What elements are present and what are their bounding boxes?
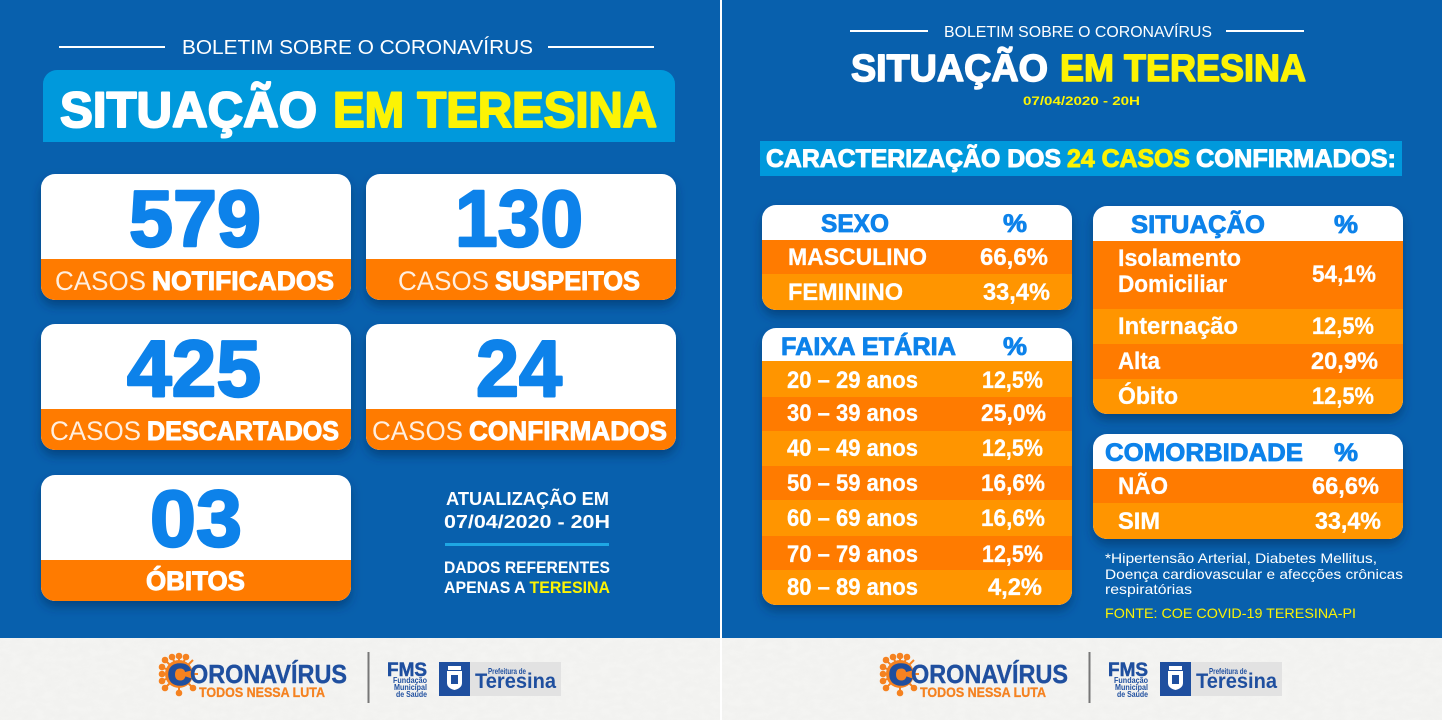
table: situação: Óbito bbox=[1118, 382, 1178, 410]
wordmark: ORONAVÍRUS bbox=[911, 659, 1068, 689]
table: situação: Alta bbox=[1118, 348, 1161, 375]
footnote: Doença cardiovascular e afecções crônicas bbox=[1105, 566, 1403, 582]
wordmark: ORONAVÍRUS bbox=[190, 659, 347, 689]
table: situação: 12,5% bbox=[1312, 383, 1374, 410]
footnote: *Hipertensão Arterial, Diabetes Mellitus, bbox=[1105, 550, 1377, 566]
table: situação: Domiciliar bbox=[1118, 271, 1227, 298]
table: comorbidade: 33,4% bbox=[1315, 508, 1381, 535]
table: faixa etária: % bbox=[1003, 333, 1027, 361]
card: casos suspeitos bbox=[366, 174, 676, 300]
table: faixa etária: 20 – 29 anos bbox=[787, 367, 918, 394]
table: situação: Internação bbox=[1118, 313, 1238, 340]
label: ÓBITOS bbox=[146, 565, 245, 596]
Prefeitura de Teresina logo bbox=[439, 662, 561, 696]
table: sexo: SEXO bbox=[821, 210, 889, 238]
FMS logo: de Saúde bbox=[396, 690, 427, 699]
label bbox=[372, 416, 667, 446]
number: 130 bbox=[455, 174, 583, 263]
label: CASOS bbox=[398, 266, 489, 296]
number: 24 bbox=[476, 324, 562, 413]
card: casos notificados bbox=[41, 174, 351, 300]
right header: EM TERESINA bbox=[1060, 48, 1306, 90]
label: DESCARTADOS bbox=[147, 416, 339, 446]
label bbox=[398, 266, 640, 296]
table: faixa etária bbox=[762, 328, 1072, 605]
subtitle banner: CARACTERIZAÇÃO DOS bbox=[766, 143, 1061, 173]
bulletin kicker: BOLETIM SOBRE O CORONAVÍRUS bbox=[944, 24, 1212, 41]
table: situação: 20,9% bbox=[1311, 348, 1378, 375]
number: 579 bbox=[129, 174, 261, 263]
label bbox=[55, 266, 334, 296]
panel: right bulletin background bbox=[722, 0, 1442, 638]
table: situação: 54,1% bbox=[1312, 261, 1376, 288]
update note: APENAS A TERESINA bbox=[444, 579, 610, 597]
table: sexo: % bbox=[1003, 210, 1027, 238]
table: faixa etária: 16,6% bbox=[981, 505, 1045, 532]
table: faixa etária: FAIXA ETÁRIA bbox=[781, 332, 956, 361]
right header bbox=[850, 24, 1306, 108]
table: situação: 12,5% bbox=[1312, 313, 1374, 340]
FMS logo bbox=[1108, 660, 1148, 699]
FMS logo bbox=[387, 660, 427, 699]
title: SITUAÇÃO bbox=[851, 46, 1048, 90]
number: 03 bbox=[150, 474, 242, 563]
table: comorbidade: 66,6% bbox=[1312, 473, 1379, 500]
date: 07/04/2020 - 20H bbox=[1023, 94, 1140, 108]
update note: 07/04/2020 - 20H bbox=[444, 512, 610, 532]
table: comorbidade: NÃO bbox=[1118, 472, 1168, 500]
FMS logo: Municipal bbox=[1115, 683, 1148, 692]
table: faixa etária: 4,2% bbox=[988, 574, 1042, 601]
footer logos: right bbox=[881, 652, 1282, 703]
label bbox=[50, 416, 339, 446]
table: situação: % bbox=[1334, 211, 1358, 239]
Prefeitura de Teresina logo: Prefeitura de bbox=[488, 666, 526, 676]
label: SUSPEITOS bbox=[495, 266, 640, 296]
label: CASOS bbox=[55, 266, 146, 296]
table: sexo: FEMININO bbox=[788, 279, 903, 306]
table: faixa etária: 80 – 89 anos bbox=[787, 574, 918, 601]
FMS logo: Fundação bbox=[1114, 676, 1148, 685]
tagline: TODOS NESSA LUTA bbox=[920, 685, 1046, 700]
table: faixa etária: 30 – 39 anos bbox=[787, 400, 918, 427]
label: CONFIRMADOS bbox=[469, 416, 667, 446]
Prefeitura de Teresina logo: Prefeitura de bbox=[1209, 666, 1247, 676]
icon: coronavirus sun: C bbox=[889, 660, 912, 692]
left title banner: EM TERESINA bbox=[333, 82, 657, 138]
table: faixa etária: 50 – 59 anos bbox=[787, 470, 918, 497]
Prefeitura de Teresina logo: Teresina bbox=[475, 670, 556, 693]
footnote bbox=[1105, 550, 1403, 597]
footer: right paper strip bbox=[722, 638, 1442, 720]
table: situação bbox=[1093, 206, 1403, 414]
table: comorbidade bbox=[1093, 434, 1403, 539]
table: faixa etária: 40 – 49 anos bbox=[787, 435, 918, 462]
title: SITUAÇÃO bbox=[60, 82, 317, 138]
icon: coronavirus sun bbox=[160, 654, 198, 695]
FMS logo: Municipal bbox=[394, 683, 427, 692]
label: CASOS bbox=[50, 416, 141, 446]
left title banner bbox=[43, 70, 675, 142]
panel: left bulletin background bbox=[0, 0, 720, 638]
tagline: TODOS NESSA LUTA bbox=[199, 685, 325, 700]
table: faixa etária: 12,5% bbox=[982, 541, 1043, 568]
table: comorbidade: SIM bbox=[1118, 508, 1160, 535]
FMS logo: de Saúde bbox=[1117, 690, 1148, 699]
table: sexo: 66,6% bbox=[980, 244, 1048, 271]
table: sexo: MASCULINO bbox=[788, 244, 927, 271]
table: faixa etária: 70 – 79 anos bbox=[787, 541, 918, 568]
card: casos confirmados bbox=[366, 324, 676, 450]
subtitle banner bbox=[760, 141, 1402, 176]
subtitle banner: CONFIRMADOS: bbox=[1196, 145, 1396, 173]
label: CASOS bbox=[372, 416, 463, 446]
table: sexo: 33,4% bbox=[983, 279, 1050, 306]
FMS logo: FMS bbox=[1108, 660, 1148, 681]
footer logos: left bbox=[160, 652, 561, 703]
update note: ATUALIZAÇÃO EM bbox=[446, 488, 609, 509]
table: faixa etária: 60 – 69 anos bbox=[787, 505, 918, 532]
FMS logo: FMS bbox=[387, 660, 427, 681]
subtitle banner: 24 CASOS bbox=[1067, 145, 1190, 173]
table: faixa etária: 12,5% bbox=[982, 435, 1043, 462]
update note bbox=[444, 488, 610, 597]
footnote: respiratórias bbox=[1105, 581, 1192, 597]
number: 425 bbox=[127, 324, 261, 413]
table: faixa etária: 12,5% bbox=[982, 367, 1043, 394]
card: óbitos bbox=[41, 474, 351, 601]
table: situação: Isolamento bbox=[1118, 245, 1241, 272]
FMS logo: Fundação bbox=[393, 676, 427, 685]
table: situação: SITUAÇÃO bbox=[1131, 209, 1265, 239]
table: faixa etária: 16,6% bbox=[981, 470, 1045, 497]
icon: coronavirus sun: C bbox=[168, 660, 191, 692]
table: faixa etária: 25,0% bbox=[981, 400, 1046, 427]
Prefeitura de Teresina logo bbox=[1160, 662, 1282, 696]
update note: DADOS REFERENTES bbox=[444, 559, 610, 577]
Prefeitura de Teresina logo: Teresina bbox=[1196, 670, 1277, 693]
table: sexo bbox=[762, 205, 1072, 310]
bulletin kicker: BOLETIM SOBRE O CORONAVÍRUS bbox=[182, 36, 533, 59]
footer: left paper strip bbox=[0, 638, 720, 720]
icon: coronavirus sun bbox=[881, 654, 919, 695]
card: casos descartados bbox=[41, 324, 351, 450]
table: comorbidade: COMORBIDADE bbox=[1105, 439, 1303, 467]
label: NOTIFICADOS bbox=[152, 266, 334, 296]
source: FONTE: COE COVID-19 TERESINA-PI bbox=[1105, 605, 1356, 621]
table: comorbidade: % bbox=[1334, 439, 1358, 467]
